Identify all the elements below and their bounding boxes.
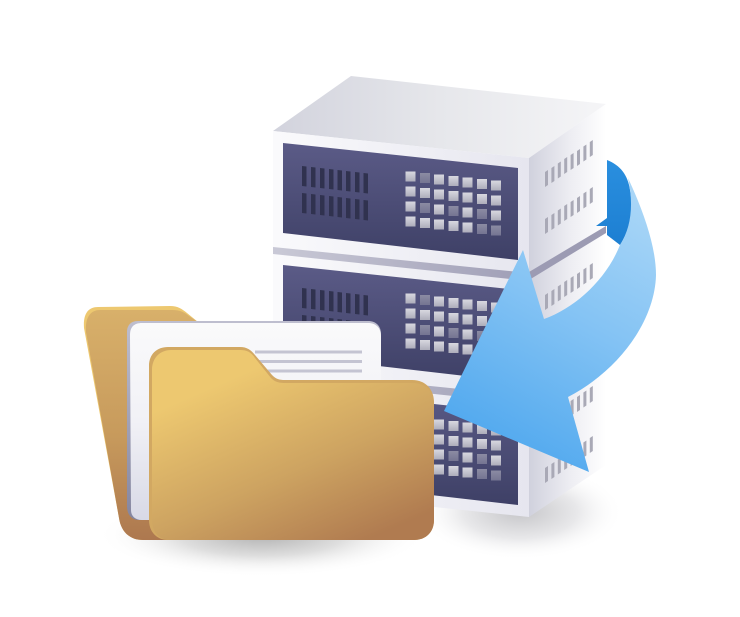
shadow: server bbox=[416, 464, 624, 560]
server side face bbox=[529, 104, 606, 517]
server top face bbox=[273, 76, 606, 158]
shadow: folder bbox=[97, 493, 427, 577]
divider grooves bbox=[273, 226, 606, 404]
folder bbox=[84, 306, 434, 540]
server unit 2 panel bbox=[283, 265, 518, 382]
server rack bbox=[273, 76, 606, 517]
side vents bbox=[545, 140, 593, 483]
paper document bbox=[127, 321, 381, 520]
folder front bbox=[149, 347, 434, 540]
arrow back fold bbox=[596, 160, 632, 245]
folder back flap bbox=[84, 306, 200, 540]
arrow front bbox=[444, 178, 656, 472]
paper text lines bbox=[255, 350, 362, 372]
server unit 1 panel bbox=[283, 143, 518, 260]
arrow: curved blue arrow bbox=[444, 160, 656, 472]
server front face bbox=[273, 131, 529, 517]
server unit 3 panel bbox=[283, 388, 518, 505]
